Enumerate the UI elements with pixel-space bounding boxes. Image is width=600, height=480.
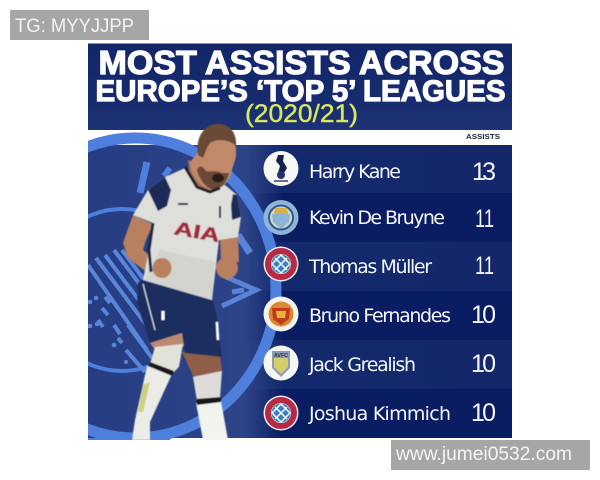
- player photo: [123, 124, 241, 440]
- watermark: TG handle: [10, 10, 149, 40]
- watermark: TG handle: TG: MYYJJPP: [15, 16, 134, 37]
- neck: [188, 160, 222, 193]
- left leg: [132, 331, 185, 440]
- background graphic: dots: [88, 296, 128, 364]
- season subtitle: (2020/21): [245, 100, 358, 128]
- title: [96, 44, 506, 108]
- background graphic: rings and stripes: [88, 132, 282, 439]
- row: Jack Grealish: [264, 346, 496, 380]
- watermark: website: www.jumei0532.com: [395, 444, 572, 465]
- row: Joshua Kimmich: [264, 396, 496, 430]
- assists value: 10: [471, 399, 496, 427]
- row: Bruno Fernandes: [264, 296, 496, 332]
- player name: Harry Kane: [309, 161, 401, 183]
- assists value: 13: [472, 158, 496, 186]
- assists value: 11: [475, 205, 494, 233]
- icon: Manchester City badge: [264, 200, 298, 235]
- player name: Thomas Müller: [308, 256, 432, 278]
- player name: Joshua Kimmich: [308, 403, 451, 425]
- row: Thomas Müller: [264, 246, 494, 282]
- title: MOST ASSISTS ACROSS: [98, 44, 504, 81]
- rows background: [245, 145, 512, 438]
- row: Harry Kane: [264, 151, 496, 186]
- row: Kevin De Bruyne: [264, 200, 494, 235]
- assists value: 10: [471, 350, 496, 378]
- assists value: 11: [475, 252, 494, 280]
- collar: [185, 167, 220, 192]
- watermark: website: [391, 440, 590, 470]
- crest and swoosh: [178, 204, 220, 218]
- player name: Kevin De Bruyne: [309, 207, 445, 229]
- shorts: [137, 279, 222, 357]
- right forearm: [220, 235, 239, 264]
- icon: Bayern Munich badge: [264, 246, 298, 282]
- panel: table and player background: [88, 132, 512, 440]
- header panel: [88, 44, 512, 130]
- column heading: assists: ASSISTS: [466, 132, 500, 141]
- icon: Tottenham badge: [264, 151, 298, 186]
- icon: Manchester United badge: [264, 296, 298, 332]
- player name: Bruno Fernandes: [309, 305, 451, 327]
- right leg: [182, 352, 228, 440]
- sleeves: [148, 177, 171, 211]
- jersey: [133, 168, 241, 300]
- fists: [152, 258, 172, 278]
- icon: Bayern Munich badge: [264, 396, 298, 430]
- title: EUROPE’S ‘TOP 5’ LEAGUES: [96, 75, 506, 108]
- left arm: [123, 215, 158, 276]
- head: [190, 124, 236, 190]
- assists value: 10: [471, 301, 496, 329]
- sponsor: AIA: [172, 218, 222, 247]
- icon: Aston Villa badge: AVFC: [274, 353, 288, 359]
- player name: Jack Grealish: [308, 354, 416, 376]
- icon: Aston Villa badge: [264, 346, 298, 380]
